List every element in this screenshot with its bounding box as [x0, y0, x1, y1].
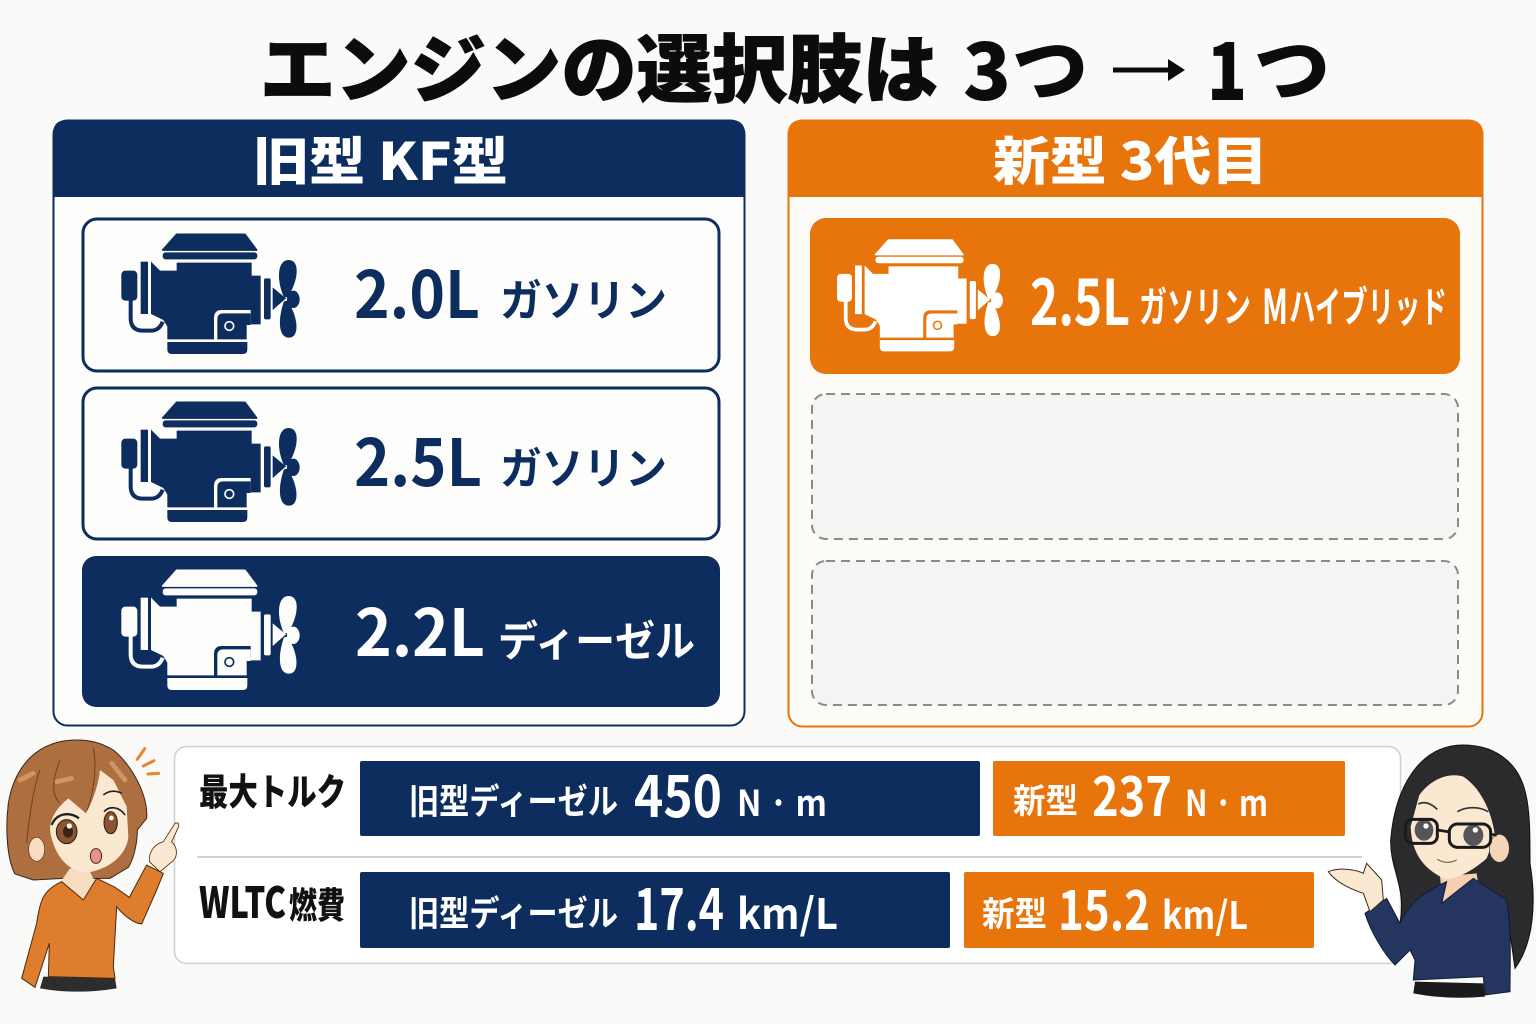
- card: 2.5L gasoline mild hybrid: ガソリン: [1139, 274, 1251, 335]
- panel header: new: [788, 120, 1483, 197]
- card: 2.5L gasoline mild hybrid: [810, 218, 1460, 374]
- panel header: old: [53, 120, 745, 197]
- bar: old fuel economy: 17.4: [634, 865, 724, 947]
- row label: max torque: 最大トルク: [199, 762, 346, 816]
- card: 2.0L gasoline: ガソリン: [500, 265, 667, 329]
- bar: old torque: [360, 752, 980, 836]
- bar: old fuel economy: [360, 865, 950, 948]
- character: woman with glasses: [1328, 745, 1533, 998]
- bar: old torque: N · m: [737, 775, 827, 827]
- panel header: new: 新型 3代目: [993, 120, 1268, 195]
- bar: new torque: [993, 753, 1345, 836]
- bar: new fuel economy: 15.2: [1058, 867, 1150, 946]
- comparison panel: [174, 746, 1400, 964]
- empty slot 1: [812, 394, 1458, 539]
- card: 2.5L gasoline: ガソリン: [500, 433, 667, 497]
- surprise ticks: [137, 749, 159, 774]
- card: 2.0L gasoline: [83, 219, 719, 371]
- card: 2.2L diesel: 2.2L: [355, 581, 485, 675]
- bar: new fuel economy: km/L: [1162, 885, 1248, 940]
- card: 2.2L diesel: ディーゼル: [498, 608, 695, 669]
- title: 3: [963, 11, 1011, 123]
- card: 2.5L gasoline mild hybrid: M: [1262, 268, 1288, 338]
- bar: old torque: 450: [634, 752, 722, 834]
- title: つ: [1254, 11, 1330, 118]
- bar: new fuel economy: [964, 867, 1314, 948]
- character: girl pointing: [7, 740, 179, 992]
- card: 2.5L gasoline mild hybrid: ハイブリッド: [1289, 274, 1447, 335]
- row label: WLTC fuel economy: 燃費: [289, 877, 345, 929]
- bar: new torque: N · m: [1185, 775, 1268, 827]
- bar: new torque: 新型: [1013, 774, 1078, 823]
- bar: old fuel economy: 旧型ディーゼル: [409, 886, 618, 937]
- card: 2.5L gasoline mild hybrid: 2.5L: [1030, 253, 1130, 344]
- title: つ: [1012, 11, 1088, 118]
- card: 2.5L gasoline: 2.5L: [354, 411, 482, 505]
- bar: new torque: 237: [1092, 753, 1172, 832]
- title: エンジンの選択肢は: [260, 11, 938, 118]
- title: 1: [1207, 11, 1247, 123]
- panel header: old: 旧型 KF型: [253, 120, 508, 195]
- empty slot 2: [812, 561, 1458, 705]
- card: 2.0L gasoline: 2.0L: [354, 243, 480, 337]
- bar: old torque: 旧型ディーゼル: [409, 774, 618, 825]
- bar: old fuel economy: km/L: [737, 881, 838, 942]
- card: 2.5L gasoline: [83, 388, 719, 539]
- bar: new fuel economy: 新型: [982, 887, 1047, 936]
- card: 2.2L diesel: [82, 556, 720, 707]
- panel: new third generation: [788, 120, 1483, 726]
- title: [260, 11, 1330, 123]
- panel: old KF model: [53, 120, 745, 726]
- row label: WLTC fuel economy: WLTC: [199, 869, 286, 931]
